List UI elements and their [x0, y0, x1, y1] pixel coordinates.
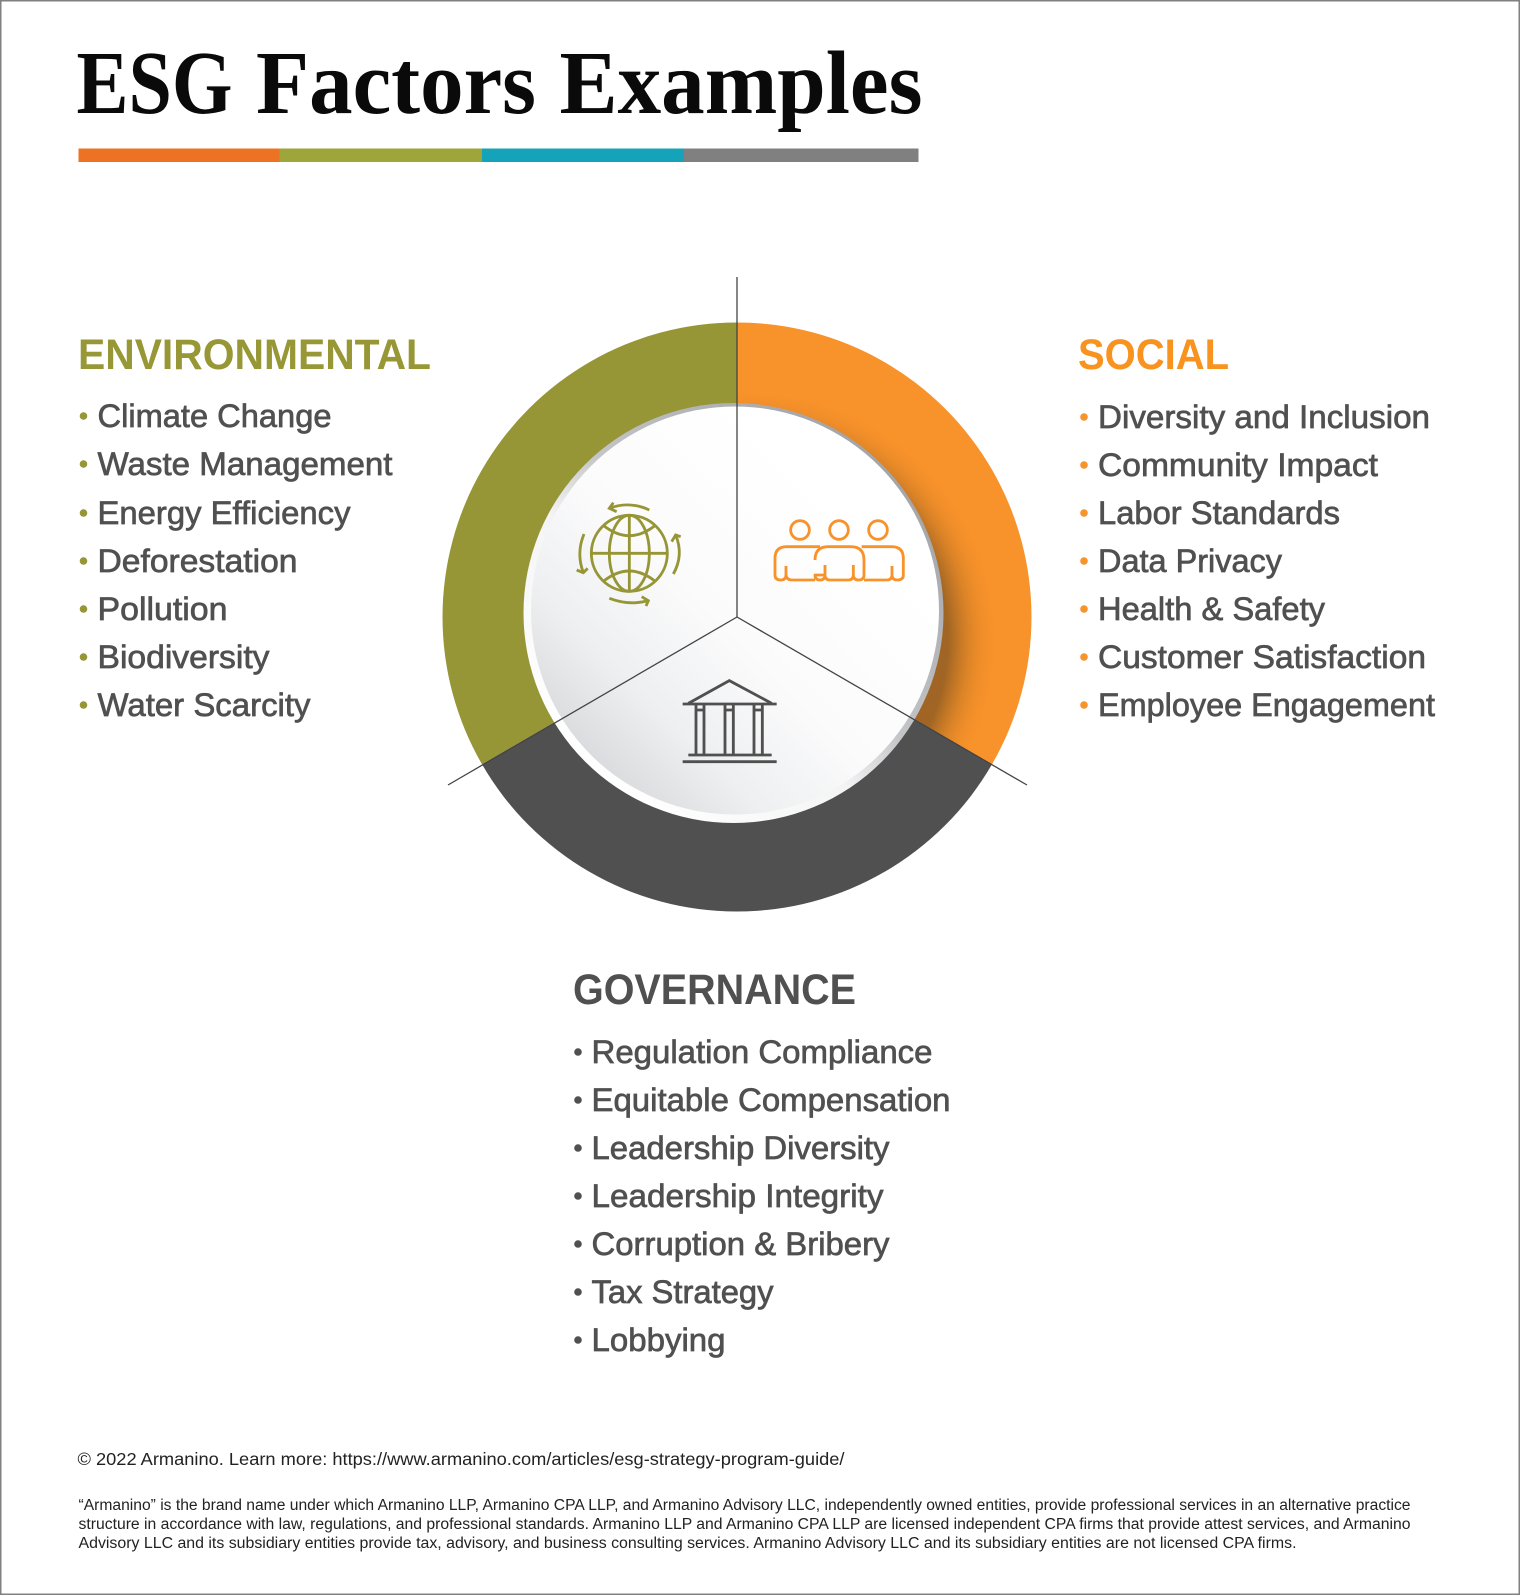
list: governance — [574, 1034, 950, 1358]
title: Factors — [256, 34, 536, 133]
title — [76, 34, 922, 133]
list: governance: Leadership Diversity — [592, 1130, 890, 1166]
list: governance: Tax Strategy — [592, 1274, 774, 1310]
segment: governance — [482, 617, 992, 911]
heading: environmental: ENVIRONMENTAL — [78, 331, 431, 379]
list: social: Health & Safety — [1098, 591, 1326, 627]
inner disc — [524, 403, 944, 823]
heading: governance: GOVERNANCE — [573, 966, 856, 1014]
list: governance: Regulation Compliance — [592, 1034, 932, 1070]
title colour bar — [78, 148, 918, 162]
list: governance: Corruption & Bribery — [592, 1226, 890, 1262]
list: governance: Equitable Compensation — [592, 1082, 950, 1118]
legal disclaimer: “Armanino” is the brand name under which Armanino LLP, Armanino CPA LLP, and Armanino Advisory LLC, independently owned entities, provide professional services in an alternative practice — [78, 1497, 1410, 1514]
list: social: Employee Engagement — [1098, 687, 1435, 723]
icon: globe with arrows — [577, 503, 681, 606]
list: environmental: Climate Change — [98, 398, 332, 434]
heading: social: SOCIAL — [1078, 331, 1229, 379]
list: social: Customer Satisfaction — [1098, 639, 1426, 675]
title: ESG — [76, 34, 232, 133]
list: governance: Lobbying — [592, 1322, 726, 1358]
list: environmental: Energy Efficiency — [98, 495, 351, 531]
list: governance: Leadership Integrity — [592, 1178, 884, 1214]
list: environmental — [80, 398, 392, 723]
list: environmental: Waste Management — [98, 446, 392, 482]
legal disclaimer: structure in accordance with law, regulations, and professional standards. Armanino LLP and Armanino CPA LLP are licensed independent CPA firms that provide attest services, and Armanino — [78, 1516, 1410, 1533]
icon: three people — [775, 521, 903, 580]
legal disclaimer — [78, 1497, 1410, 1552]
icon: government building — [683, 681, 777, 762]
list: environmental: Biodiversity — [98, 639, 270, 675]
legal disclaimer: Advisory LLC and its subsidiary entities provide tax, advisory, and business consulting services. Armanino Advisory LLC and its subsidiary entities are not licensed CPA firms. — [78, 1535, 1296, 1552]
list: social: Data Privacy — [1098, 543, 1283, 579]
list: social: Diversity and Inclusion — [1098, 399, 1430, 435]
list: environmental: Deforestation — [98, 543, 298, 579]
list: social: Labor Standards — [1098, 495, 1340, 531]
dividing lines — [448, 277, 1027, 785]
list: environmental: Pollution — [98, 591, 228, 627]
title: Examples — [560, 34, 922, 133]
list: social: Community Impact — [1098, 447, 1378, 483]
list: social — [1080, 399, 1435, 723]
ring chart — [443, 277, 1031, 911]
segment: social — [738, 322, 1032, 764]
source line: © 2022 Armanino. Learn more: https://www.armanino.com/articles/esg-strategy-program-guide/ — [78, 1449, 845, 1469]
segment: environmental — [443, 322, 737, 764]
list: environmental: Water Scarcity — [98, 687, 311, 723]
